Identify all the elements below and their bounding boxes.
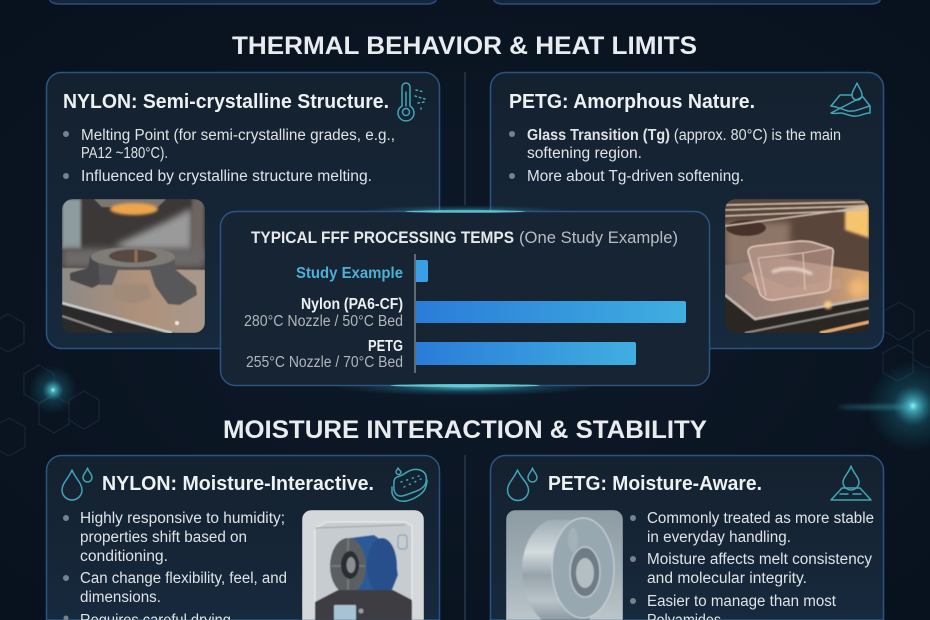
chart title: (One Study Example) [519,228,678,247]
title: thermal behavior: THERMAL BEHAVIOR & HEAT LIMITS [232,32,697,60]
icon: water drops [62,468,92,500]
decorative hexagon pattern: left [0,314,99,456]
bar: nylon: 280°C Nozzle / 50°C Bed [244,313,403,330]
glow: right lens flare [838,361,930,451]
bar: petg: PETG [368,338,403,355]
bar: nylon: Nylon (PA6-CF) [301,296,403,313]
photo: PETG spool [506,510,623,620]
bar: petg [246,338,636,371]
icon: water drops petg [508,468,537,500]
bullet list: petg moisture: Moisture affects melt consistency [647,551,872,568]
glow: left spark [29,366,77,414]
bar chart [244,254,686,373]
bullet list: petg moisture: and molecular integrity. [647,570,807,587]
bullet list: nylon moisture [63,510,287,620]
bullet list: nylon thermal: PA12 ~180°C). [81,145,168,162]
bar: nylon [244,296,686,330]
bar: petg: 255°C Nozzle / 70°C Bed [246,354,403,371]
chart panel: typical FFF processing temps [220,205,710,396]
panel: petg moisture [490,456,884,620]
photo: printed nylon part [62,199,205,333]
icon: thermometer [398,83,425,121]
heading: nylon semi-crystalline: NYLON: Semi-crystalline Structure. [63,91,389,113]
panel: nylon moisture [46,456,440,620]
bullet list: nylon thermal [63,127,395,185]
bullet list: nylon moisture: conditioning. [80,548,168,565]
bullet list: petg moisture: Commonly treated as more stable [647,510,874,527]
center divider [464,72,466,620]
bullet list: petg thermal [509,127,841,185]
bullet list: petg thermal: Glass Transition (Tg) (approx. 80°C) is the main [527,127,841,144]
bullet list: petg thermal: More about Tg-driven softening. [527,168,744,185]
bar: study example [296,260,428,282]
bullet list: nylon moisture: Can change flexibility, feel, and [80,570,287,587]
bullet list: nylon thermal: Influenced by crystalline structure melting. [81,168,372,185]
heading: petg amorphous: PETG: Amorphous Nature. [509,91,755,113]
chart title: TYPICAL FFF PROCESSING TEMPS [251,228,514,247]
bullet list: nylon moisture: dimensions. [80,589,161,606]
decorative hexagon pattern: right [883,302,930,381]
icon: drop on surface [831,466,871,500]
title: moisture interaction: MOISTURE INTERACTION & STABILITY [223,416,707,444]
bullet list: petg moisture [630,510,874,620]
bullet list: nylon moisture: Highly responsive to humidity; [80,510,285,527]
bullet list: petg moisture: Easier to manage than most [647,593,837,610]
bullet list: petg thermal: softening region. [527,145,642,162]
panel: top cards remnant [50,0,880,4]
bar: study example: Study Example [296,265,403,282]
heading: nylon moisture-interactive: NYLON: Moisture-Interactive. [102,473,374,495]
bullet list: nylon moisture: properties shift based on [80,529,247,546]
bullet list: nylon thermal: Melting Point (for semi-crystalline grades, e.g., [81,127,395,144]
panel: nylon thermal [46,72,440,348]
photo: filament dryer box [302,510,424,620]
panel: petg thermal [490,72,884,348]
heading: petg moisture-aware: PETG: Moisture-Aware. [548,473,762,495]
photo: PETG box in oven [725,199,869,333]
icon: sponge with drop [392,468,427,501]
icon: softening surface with drop [831,83,870,116]
bullet list: petg moisture: in everyday handling. [647,529,791,546]
